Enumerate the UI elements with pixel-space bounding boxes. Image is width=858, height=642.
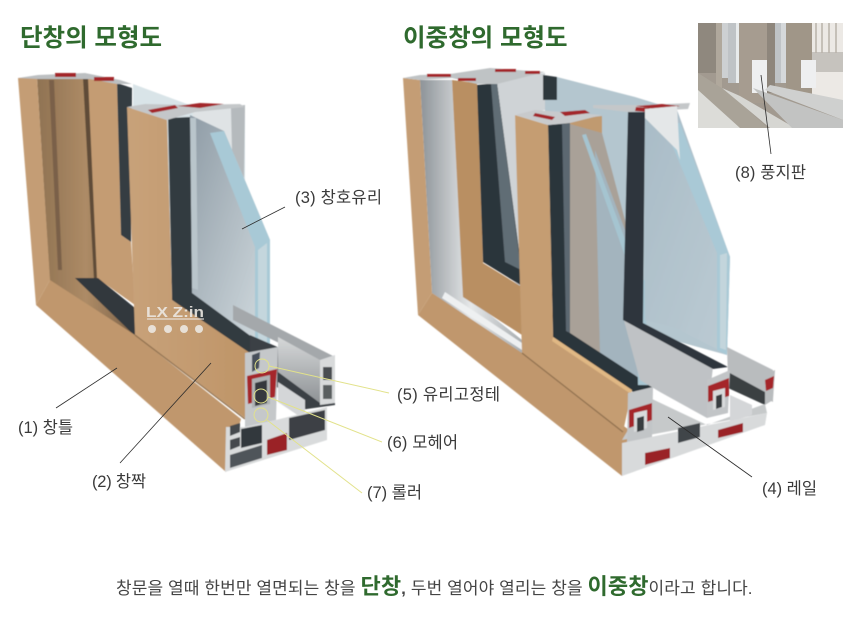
single window model [18,73,335,472]
sash and sill seam [522,353,623,432]
label (7): (7) 롤러 [367,483,422,502]
red chambers [645,448,670,465]
second sash dark strip [623,112,728,369]
back glass [133,84,270,347]
frame face [403,78,432,315]
label (5): (5) 유리고정테 [397,385,500,404]
rear end profile [320,355,335,405]
front glass edge [582,134,640,290]
frame face [18,78,50,305]
front dark strip [548,123,653,392]
top cap rear [403,68,545,84]
floor [622,398,767,440]
front sash end section [245,347,278,427]
sill [418,293,632,476]
label (4): (4) 레일 [762,479,817,498]
double window model [403,68,775,476]
wood behind top [548,116,602,133]
white frame top [645,106,680,160]
front top cap [127,104,245,120]
label (3): (3) 창호유리 [295,188,382,207]
first sash end [627,387,653,443]
rear glass [545,77,730,355]
second sash top [593,103,690,112]
top cap rear [18,73,132,84]
sash and sill seam [135,335,245,419]
watermark logo [146,305,204,333]
front sash [515,115,632,432]
front sash [127,107,250,418]
front sash top cap [515,110,602,125]
second sash end [707,370,730,418]
label (6): (6) 모헤어 [387,433,458,452]
watermark logo: LX Z:in [146,305,204,321]
rear grey frame [490,73,545,290]
back channel [477,83,522,286]
frame interior [420,80,522,356]
inset photo: weather strip [698,23,843,128]
line (8) [761,75,771,154]
label (8): (8) 풍지판 [735,163,806,182]
second sash glass [645,110,730,353]
circle and line (6) [254,389,382,442]
base profile [622,413,767,476]
track rail [75,278,135,336]
main glass [190,115,270,353]
rear track [727,347,773,402]
dark glazing strip [168,117,256,355]
caption: 창문을 열때 한번만 열면되는 창을 단창, 두번 열어야 열리는 창을 이중창이라고 합니다. [116,574,753,599]
glass edge [210,131,270,350]
circle and line (5) [255,359,389,393]
line (2) [120,363,211,463]
third end [765,370,775,405]
title: double window: 이중창의 모형도 [403,24,568,52]
leader lines [56,75,771,493]
rear track [233,305,335,371]
circle and line (7) [254,408,362,493]
rear white frame [193,105,245,175]
second sash glass edge [663,123,730,355]
tan behind glass [570,117,640,385]
middle rail [278,382,305,420]
label (1): (1) 창틀 [18,418,73,437]
channel [117,83,132,242]
label (2): (2) 창짝 [92,472,146,491]
frame interior [37,78,135,340]
base profile [225,407,327,472]
title: single window: 단창의 모형도 [20,24,162,52]
line (4) [668,417,752,477]
rear track panel [278,337,320,403]
red chamber [267,433,287,455]
back sash [452,80,522,335]
line (3) [242,207,285,229]
sill [36,280,241,472]
second sash white panel [623,317,713,418]
back sash [88,77,135,305]
line (1) [56,368,117,408]
